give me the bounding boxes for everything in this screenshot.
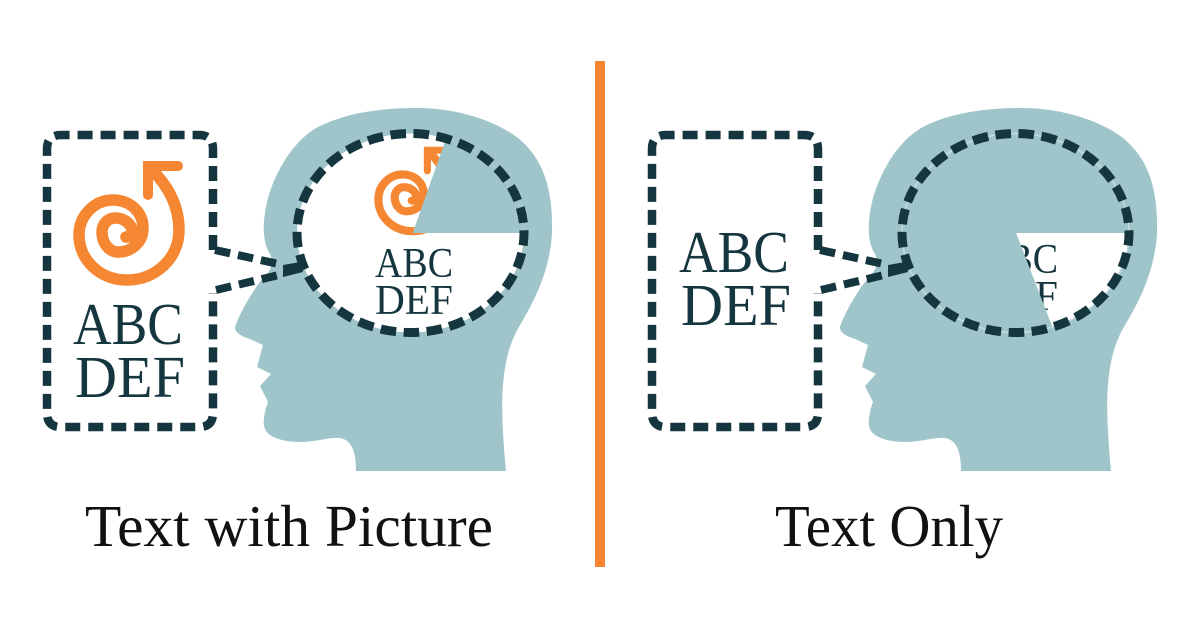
caption: Text with Picture bbox=[85, 493, 493, 559]
panel: text with picture bbox=[47, 108, 552, 559]
forgotten area over text bbox=[960, 233, 1052, 327]
recalled text fragment: ABC bbox=[980, 237, 1058, 283]
text box bbox=[652, 135, 818, 427]
recalled text: ABC bbox=[375, 241, 453, 287]
sight lines from eye to box bbox=[215, 250, 303, 290]
icon: head silhouette bbox=[235, 108, 552, 471]
box text: ABC bbox=[73, 291, 183, 357]
box text: DEF bbox=[75, 344, 185, 410]
caption: Text Only bbox=[775, 493, 1003, 559]
panel: text only bbox=[652, 108, 1157, 559]
box text: ABC bbox=[679, 219, 789, 285]
forgotten wedge bbox=[413, 139, 524, 233]
recalled text: DEF bbox=[375, 278, 453, 324]
recalled text fragment: DEF bbox=[980, 274, 1058, 320]
box text bbox=[679, 219, 791, 338]
box text bbox=[73, 291, 185, 410]
remembered white sector bbox=[1016, 233, 1129, 327]
sight lines from eye to box bbox=[820, 250, 908, 290]
picture and text box bbox=[47, 135, 213, 427]
memory ellipse outline bbox=[297, 134, 524, 332]
memory ellipse background bbox=[297, 134, 524, 332]
icon: head silhouette bbox=[840, 108, 1157, 471]
memory ellipse outline bbox=[902, 134, 1129, 332]
recalled text bbox=[375, 241, 453, 324]
box text: DEF bbox=[681, 272, 791, 338]
divider bbox=[595, 61, 605, 567]
icon: spiral arrow bbox=[79, 166, 179, 280]
icon: recalled spiral arrow bbox=[378, 150, 449, 231]
recalled text fragment bbox=[980, 237, 1058, 320]
